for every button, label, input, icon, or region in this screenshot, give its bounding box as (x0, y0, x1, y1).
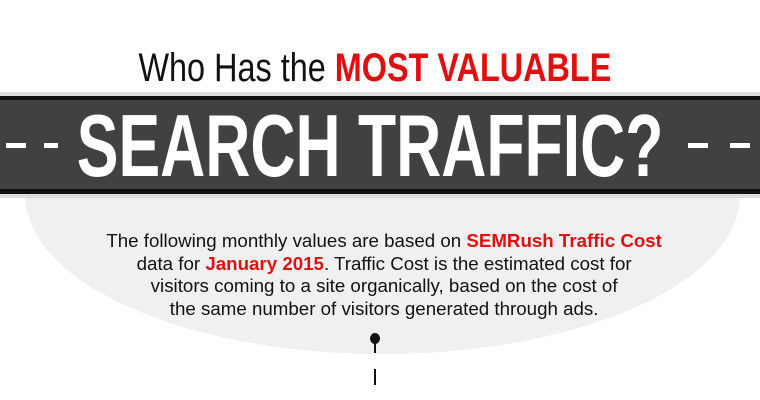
heading: search traffic: SEARCH TRAFFIC? (77, 96, 663, 195)
banner dashes left (6, 143, 26, 148)
icon: pin (370, 333, 380, 353)
background ellipse (25, 198, 740, 354)
title line 1: Who Has the MOST VALUABLE (139, 46, 611, 90)
description text: the same number of visitors generated through ads. (170, 298, 598, 318)
banner (0, 92, 760, 198)
connector line (374, 369, 376, 385)
banner dashes right (688, 143, 708, 148)
description text: The following monthly values are based on SEMRush Traffic Cost (106, 231, 662, 251)
description text: visitors coming to a site organically, based on the cost of (151, 276, 617, 296)
description text (106, 231, 662, 319)
description text: data for January 2015. Traffic Cost is the estimated cost for (137, 254, 631, 274)
